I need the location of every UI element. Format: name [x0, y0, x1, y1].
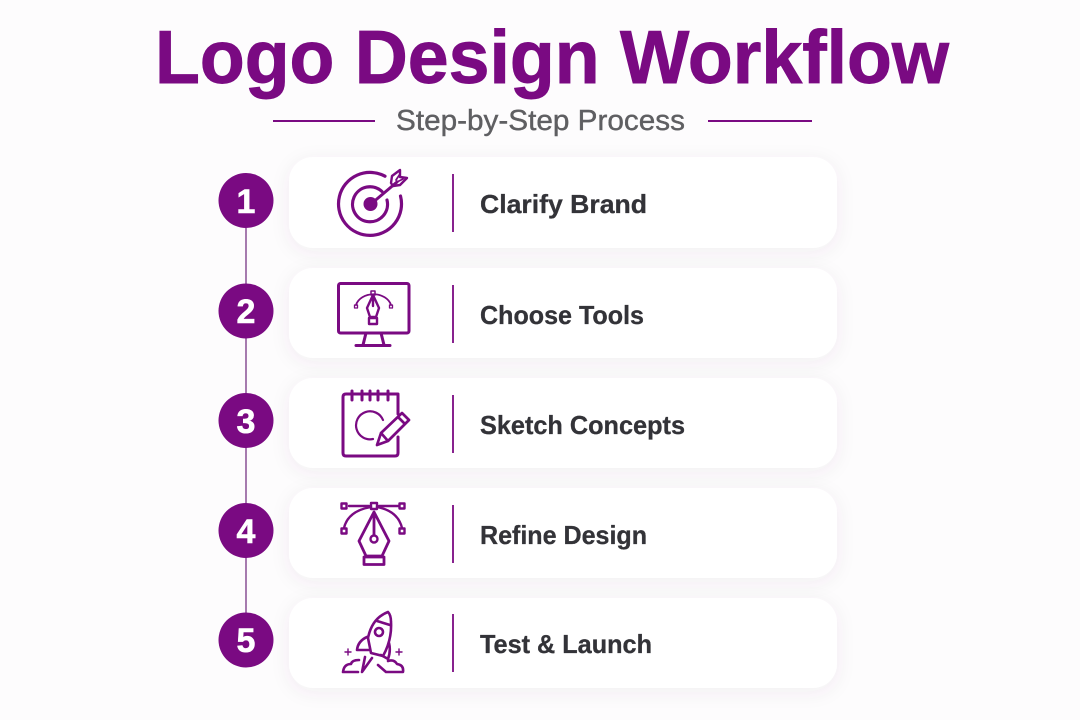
step 3 card	[218, 378, 837, 468]
step 3 number badge	[218, 393, 274, 448]
step 4 number badge	[218, 503, 274, 558]
step 4 number badge: 4	[237, 513, 256, 551]
step 5 number badge	[218, 612, 274, 668]
icon: target with arrow	[339, 170, 407, 235]
step 1 number badge: 1	[237, 183, 255, 221]
step 4 card	[218, 488, 837, 578]
icon: monitor with pen nib	[338, 284, 409, 346]
step 5 card	[218, 598, 837, 688]
timeline connector	[245, 228, 247, 614]
icon: sketch pad and pencil	[343, 391, 409, 456]
step 1 label: Clarify Brand	[480, 189, 647, 219]
step 1 number badge	[218, 173, 274, 228]
title: Logo Design Workflow	[155, 15, 950, 99]
step 4 label: Refine Design	[480, 520, 647, 550]
icon: rocket launch	[343, 612, 403, 672]
step 5 label: Test & Launch	[480, 629, 652, 659]
step 2 card	[218, 268, 837, 358]
step 3 label: Sketch Concepts	[480, 410, 685, 440]
step 3 number badge: 3	[237, 403, 255, 441]
step 2 number badge: 2	[237, 293, 255, 331]
step 2 label: Choose Tools	[480, 300, 644, 330]
icon: bezier pen tool	[342, 503, 404, 564]
step 2 number badge	[218, 284, 274, 338]
step 1 card	[218, 157, 837, 248]
step 5 number badge: 5	[237, 622, 255, 660]
subtitle with rules: Step-by-Step Process	[396, 105, 685, 137]
